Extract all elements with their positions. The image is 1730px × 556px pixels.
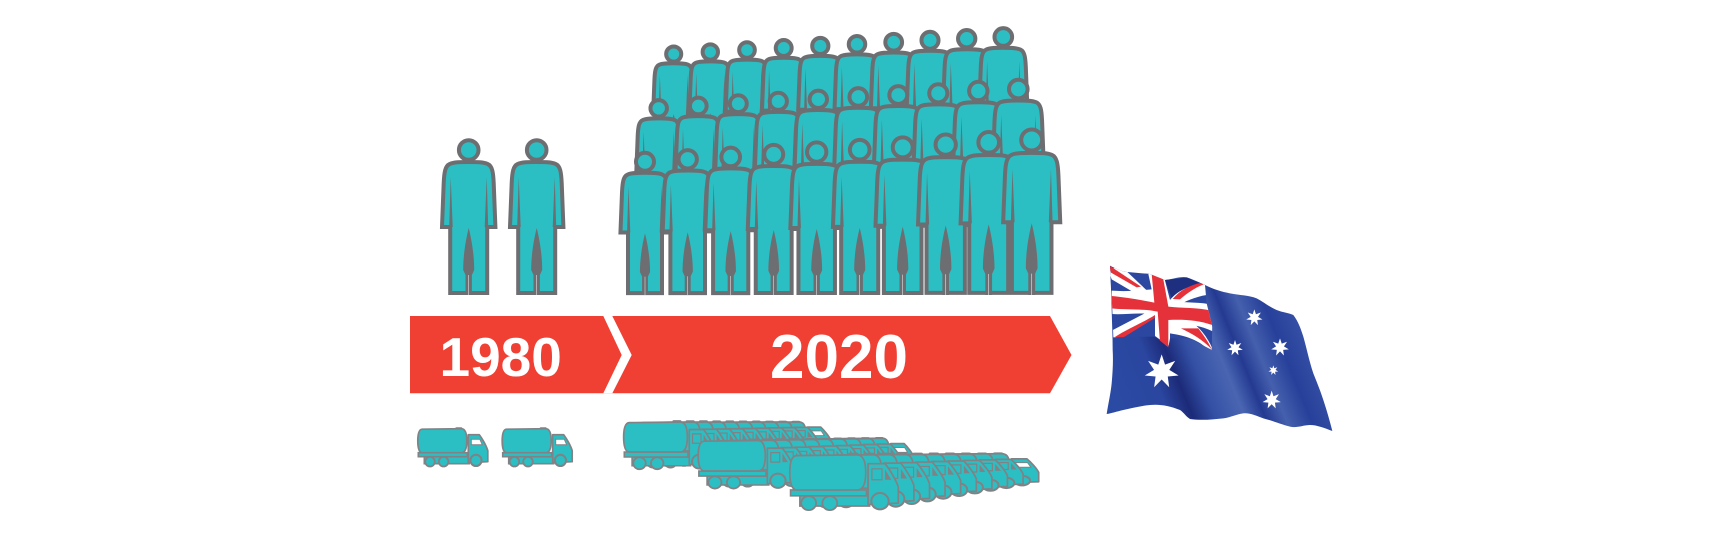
Australian flag	[1105, 260, 1332, 431]
people 1980	[442, 140, 563, 295]
truck	[418, 427, 488, 466]
truck	[502, 427, 572, 466]
third truck row	[790, 452, 1039, 510]
red arrow bar	[410, 316, 1072, 393]
commonwealth star	[1145, 354, 1179, 387]
middle row of people	[636, 80, 1044, 230]
flag field	[1107, 266, 1332, 431]
union jack canton	[1110, 266, 1212, 350]
person	[442, 140, 495, 295]
southern cross stars	[1227, 309, 1289, 408]
trucks 2020 fleet	[624, 420, 1039, 510]
people 2020 crowd	[620, 28, 1060, 295]
back row of people	[653, 28, 1027, 167]
timeline arrow banner	[410, 316, 1072, 393]
second truck row	[698, 437, 914, 489]
first truck row	[624, 420, 831, 469]
person	[510, 140, 563, 295]
trucks 1980	[418, 427, 572, 466]
label 2020: 2020	[770, 323, 908, 392]
label 1980: 1980	[440, 326, 562, 388]
white chevron divider	[603, 316, 632, 393]
front row of people	[620, 130, 1060, 295]
